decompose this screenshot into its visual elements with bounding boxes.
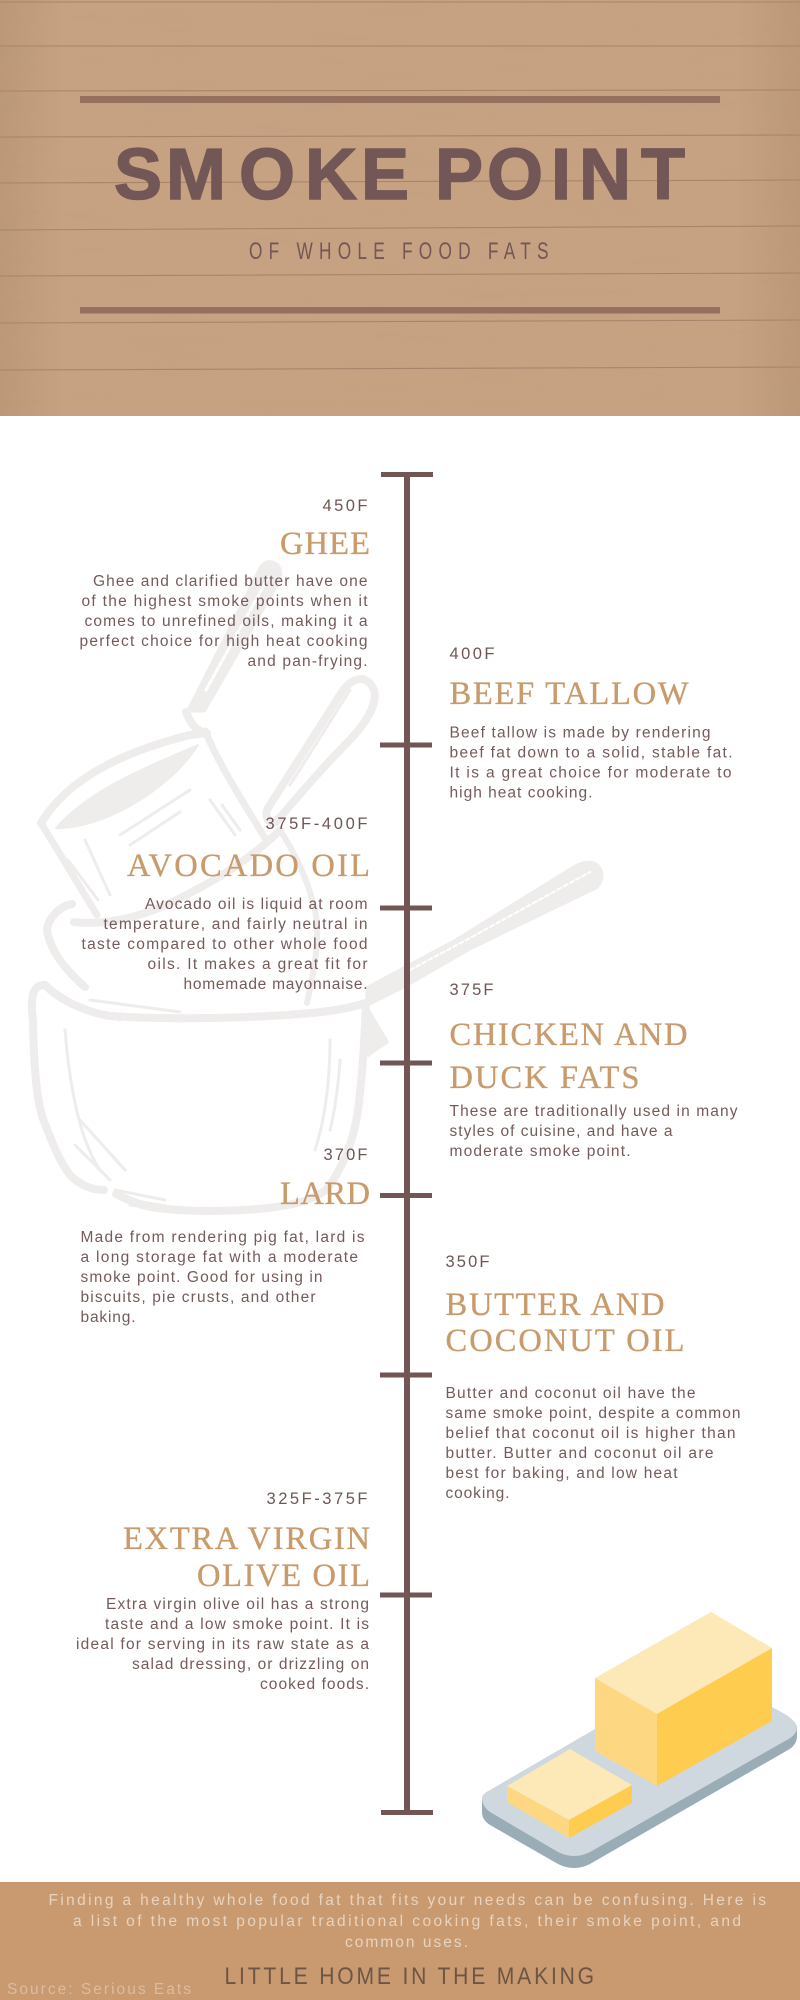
heading: butter and coconut oil: BUTTER AND — [446, 1287, 664, 1323]
description: avocado oil: oils. It makes a great fit for — [148, 956, 368, 973]
temperature: 375F-400F: 375F-400F — [266, 815, 368, 833]
description: ghee: perfect choice for high heat cooking — [80, 633, 368, 650]
description: lard: Made from rendering pig fat, lard is — [80, 1229, 365, 1246]
intro text — [48, 1892, 766, 1951]
panel: extra virgin olive oil — [76, 1490, 370, 1693]
temperature: 375F: 375F — [450, 981, 494, 999]
pot handle — [366, 861, 603, 1007]
description: extra virgin olive oil: taste and a low smoke point. It is — [105, 1616, 369, 1633]
temperature: 400F: 400F — [450, 645, 494, 663]
panel: footer — [0, 1882, 800, 2000]
heading: chicken and duck fats: CHICKEN AND — [450, 1017, 688, 1053]
description: beef tallow: Beef tallow is made by rendering — [450, 724, 710, 742]
description: chicken and duck fats: moderate smoke point. — [450, 1143, 630, 1160]
heading: butter and coconut oil: COCONUT OIL — [446, 1323, 684, 1359]
description: butter and coconut oil: best for baking, and low heat — [446, 1465, 678, 1482]
title: SMOKE POINT — [114, 135, 685, 215]
description: butter and coconut oil: Butter and coconut oil have the — [446, 1385, 696, 1402]
panel: avocado oil — [82, 815, 370, 993]
description: chicken and duck fats: styles of cuisine, and have a — [450, 1123, 673, 1140]
panel: chicken and duck fats — [450, 981, 738, 1160]
panel: beef tallow — [450, 645, 732, 802]
description: extra virgin olive oil: cooked foods. — [260, 1676, 369, 1693]
description: ghee: of the highest smoke points when it — [82, 593, 368, 610]
description: beef tallow: high heat cooking. — [450, 784, 592, 802]
description: ghee: and pan-frying. — [248, 653, 368, 670]
source note: Source: Serious Eats — [7, 1981, 191, 1998]
subtitle: OF WHOLE FOOD FATS — [249, 238, 549, 265]
description: butter and coconut oil: belief that coconut oil is higher than — [446, 1425, 736, 1442]
heading: beef tallow: BEEF TALLOW — [450, 676, 689, 712]
description: extra virgin olive oil: ideal for serving in its raw state as a — [76, 1636, 369, 1653]
heading: extra virgin olive oil — [123, 1521, 370, 1594]
panel: butter and coconut oil — [446, 1253, 740, 1502]
brand name: LITTLE HOME IN THE MAKING — [224, 1963, 594, 1989]
panel: wood header — [0, 0, 800, 416]
description: avocado oil: Avocado oil is liquid at room — [145, 896, 368, 913]
description: extra virgin olive oil: salad dressing, or drizzling on — [132, 1656, 369, 1673]
description: avocado oil: taste compared to other whole food — [82, 936, 368, 953]
description: lard: a long storage fat with a moderate — [80, 1249, 358, 1266]
description: ghee: Ghee and clarified butter have one — [93, 573, 368, 590]
panel: ghee — [80, 497, 370, 670]
illustration: stacked pots watermark — [32, 560, 603, 1211]
intro text: common uses. — [345, 1934, 468, 1951]
heading: chicken and duck fats — [450, 1017, 688, 1096]
description: butter and coconut oil — [446, 1385, 740, 1502]
description: lard — [80, 1229, 365, 1326]
description: lard: biscuits, pie crusts, and other — [80, 1289, 316, 1306]
heading: avocado oil: AVOCADO OIL — [127, 848, 370, 884]
description: beef tallow — [450, 724, 732, 802]
heading: butter and coconut oil — [446, 1287, 684, 1359]
description: lard: smoke point. Good for using in — [80, 1269, 322, 1286]
illustration: butter on a dish — [482, 1612, 797, 1868]
top pot handle — [186, 560, 282, 712]
intro text: a list of the most popular traditional cooking fats, their smoke point, and — [73, 1913, 741, 1930]
description: butter and coconut oil: butter. Butter and coconut oil are — [446, 1445, 714, 1462]
description: ghee — [80, 573, 368, 670]
temperature: 325F-375F: 325F-375F — [266, 1490, 368, 1508]
description: butter and coconut oil: same smoke point, despite a common — [446, 1405, 740, 1422]
intro text: Finding a healthy whole food fat that fits your needs can be confusing. Here is — [48, 1892, 766, 1909]
description: avocado oil: temperature, and fairly neutral in — [104, 916, 368, 933]
temperature: 450F: 450F — [322, 497, 368, 515]
panel: lard — [80, 1146, 370, 1326]
heading: lard: LARD — [280, 1176, 370, 1212]
heading: ghee: GHEE — [280, 526, 370, 562]
description: extra virgin olive oil — [76, 1596, 369, 1693]
description: avocado oil — [82, 896, 368, 993]
heading: extra virgin olive oil: OLIVE OIL — [197, 1558, 370, 1594]
bottom header bar — [80, 307, 720, 314]
description: avocado oil: homemade mayonnaise. — [184, 976, 368, 993]
temperature: 370F: 370F — [324, 1146, 368, 1164]
description: beef tallow: It is a great choice for moderate to — [450, 764, 732, 782]
description: chicken and duck fats: These are traditionally used in many — [450, 1103, 738, 1120]
temperature: 350F: 350F — [446, 1253, 490, 1271]
description: butter and coconut oil: cooking. — [446, 1485, 510, 1502]
description: beef tallow: beef fat down to a solid, stable fat. — [450, 744, 732, 762]
top header bar — [80, 96, 720, 103]
timeline axis — [380, 472, 433, 1815]
description: ghee: comes to unrefined oils, making it a — [84, 613, 368, 630]
description: extra virgin olive oil: Extra virgin olive oil has a strong — [106, 1596, 369, 1613]
description: chicken and duck fats — [450, 1103, 738, 1160]
description: lard: baking. — [80, 1309, 136, 1326]
heading: extra virgin olive oil: EXTRA VIRGIN — [123, 1521, 370, 1557]
small handle bracket — [366, 1005, 388, 1056]
heading: chicken and duck fats: DUCK FATS — [450, 1060, 640, 1096]
